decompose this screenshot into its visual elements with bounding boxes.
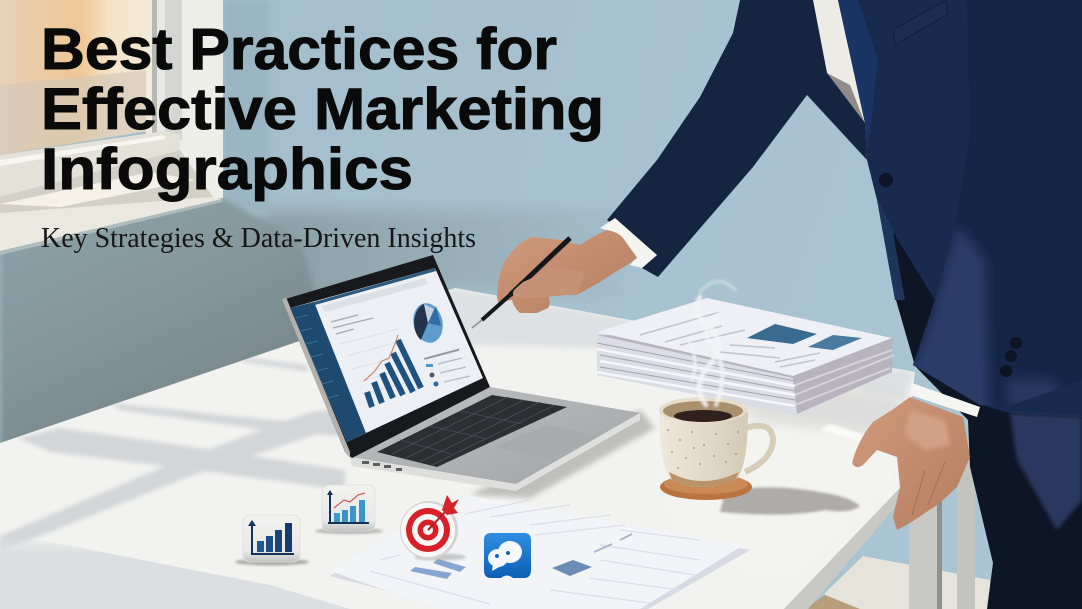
jacket button (879, 173, 893, 187)
legend on screen (424, 349, 470, 386)
dashboard sidebar (290, 302, 366, 442)
laptop shadow (470, 410, 655, 498)
sidebar menu items (296, 315, 339, 398)
summary text on screen (331, 315, 373, 334)
ports (362, 461, 402, 471)
shirt (813, 0, 865, 123)
tie (838, 0, 878, 150)
thumb (513, 267, 585, 298)
trend line on screen (364, 335, 398, 381)
top report sheet (597, 298, 892, 376)
gridlines on screen (340, 329, 424, 394)
title (41, 17, 604, 202)
steam (688, 281, 735, 405)
laptop base (350, 387, 640, 484)
bar chart on screen (367, 340, 421, 407)
bottom report sheet (330, 494, 750, 609)
right sleeve (913, 232, 1055, 406)
title: Best Practices for (41, 17, 557, 82)
cup speckles (667, 429, 739, 469)
icon: target with dart (400, 495, 466, 560)
table legs (909, 440, 975, 609)
screen bezel (282, 255, 490, 458)
jacket front flap (877, 200, 905, 300)
jacket body (838, 0, 1082, 417)
icon: bar chart tile (235, 515, 309, 566)
subtitle: Key Strategies & Data-Driven Insights (41, 223, 476, 254)
man in navy suit (472, 0, 1082, 609)
trousers (893, 232, 1082, 609)
baseboard and floor (805, 556, 990, 609)
cuff buttons (1000, 337, 1022, 377)
stack of reports (596, 298, 894, 414)
pie chart on screen (410, 300, 446, 346)
window (0, 0, 223, 255)
jacket tail folds (1010, 413, 1082, 530)
title: Effective Marketing (41, 77, 604, 142)
desk (0, 288, 915, 609)
cup shadow (720, 487, 860, 515)
title: Infographics (41, 137, 413, 202)
laptop (282, 255, 655, 498)
keyboard (377, 395, 567, 467)
window shadow bands (0, 357, 345, 552)
cup rim (659, 397, 747, 423)
chest pocket (893, 0, 948, 45)
screen (290, 268, 483, 442)
hand with pen (472, 230, 637, 328)
icon: growth chart tile (315, 485, 383, 534)
coffee cup (659, 281, 860, 515)
left cuff (600, 218, 657, 268)
left sleeve and shoulder (607, 0, 867, 277)
pen (510, 238, 570, 295)
icon: blue chat bubble tile (484, 533, 531, 578)
handle (745, 426, 773, 472)
trackpad (493, 425, 598, 460)
saucer (660, 474, 752, 500)
cup body (659, 412, 748, 487)
right cuff (910, 383, 980, 417)
hand on desk (852, 397, 970, 530)
